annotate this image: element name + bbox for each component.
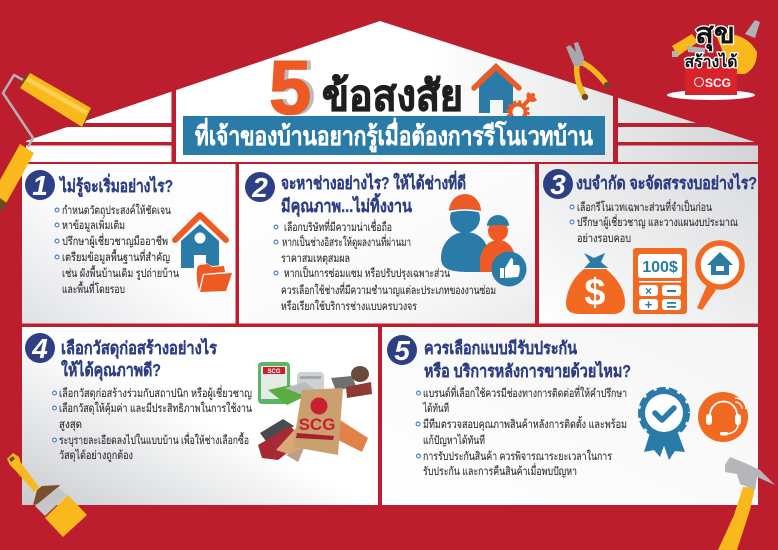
checklist 2: หรือเรียกใช้บริการช่างแบบครบวงจร bbox=[281, 300, 417, 313]
checklist 2: หากเป็นช่างอิสระให้ดูผลงานที่ผ่านมา bbox=[282, 234, 411, 249]
checklist 5: การรับประกันสินค้า ควรพิจารณาระยะเวลาในการ bbox=[423, 450, 612, 463]
icon: calculator: 100$ bbox=[642, 259, 678, 276]
checklist 1: และพื้นที่โดยรอบ bbox=[62, 281, 125, 296]
panel 3: limited budget bbox=[539, 164, 758, 324]
icon: paint roller bbox=[0, 72, 92, 212]
checklist 2: เลือกบริษัทที่มีความน่าเชื่อถือ bbox=[284, 219, 392, 234]
image: SCG building materials bbox=[258, 362, 372, 462]
icon: calculator: × bbox=[645, 284, 652, 298]
checklist 4: สูงสุด bbox=[59, 419, 82, 431]
heading 5: ควรเลือกแบบมีรับประกัน bbox=[424, 338, 577, 358]
house roof with siding bbox=[0, 21, 778, 165]
heading 2: จะหาช่างอย่างไร? ให้ได้ช่างที่ดี bbox=[281, 170, 466, 193]
image: SCG building materials: SCG bbox=[299, 415, 335, 434]
number badge 3 bbox=[543, 169, 573, 200]
number badge 5: 5 bbox=[394, 335, 410, 366]
icon: headset support bbox=[698, 392, 748, 442]
icon: house and folder bbox=[175, 215, 232, 292]
icon: money bag bbox=[566, 253, 625, 314]
checklist 1: หาข้อมูลเพิ่มเติม bbox=[62, 217, 125, 232]
logo: SCG campaign badge bbox=[667, 18, 760, 100]
icon: paint brush bbox=[7, 453, 87, 537]
icon: quality badge bbox=[640, 388, 688, 460]
checklist 3 bbox=[570, 199, 738, 245]
logo: SCG campaign badge: SCG bbox=[705, 76, 731, 90]
title: big number 5: 5 bbox=[273, 46, 315, 131]
checklist 1: เตรียมข้อมูลพื้นฐานที่สำคัญ bbox=[62, 249, 170, 264]
heading 4 bbox=[61, 337, 217, 381]
title: heading: ข้อสงสัย bbox=[322, 72, 463, 119]
checklist 3: อย่างรอบคอบ bbox=[577, 233, 631, 245]
heading 1: ไม่รู้จะเริ่มอย่างไร? bbox=[58, 173, 173, 198]
heading 2: มีคุณภาพ...ไม่ทิ้งงาน bbox=[281, 193, 412, 217]
checklist 4: วัสดุได้อย่างถูกต้อง bbox=[59, 449, 133, 462]
checklist 4: เลือกวัสดุก่อสร้างร่วมกับสถาปนิก หรือผู้เชี่ยวชาญ bbox=[59, 385, 252, 400]
icon: calculator bbox=[633, 248, 687, 314]
panel 2: finding a contractor bbox=[239, 164, 535, 324]
number badge 1: 1 bbox=[32, 170, 48, 201]
checklist 5: ได้ทันที bbox=[422, 402, 449, 415]
checklist 2: หากเป็นการซ่อมแซม หรือปรับปรุงเฉพาะส่วน bbox=[284, 265, 450, 280]
checklist 2: ควรเลือกใช้ช่างที่มีความชำนาญแต่ละประเภทของงานซ่อม bbox=[281, 282, 496, 297]
logo: SCG campaign badge: สุข bbox=[695, 18, 735, 51]
checklist 4: เลือกวัสดุให้คุ้มค่า และมีประสิทธิภาพในการใช้งาน bbox=[59, 402, 252, 415]
icon: hammer bbox=[718, 457, 775, 550]
checklist 4: ระบุรายละเอียดลงไปในแบบบ้าน เพื่อให้ช่างเลือกซื้อ bbox=[59, 432, 249, 447]
icon: calculator: + bbox=[645, 297, 653, 312]
checklist 5: แบรนด์ที่เลือกใช้ควรมีช่องทางการติดต่อที่ให้คำปรึกษา bbox=[423, 385, 627, 400]
checklist 4 bbox=[53, 385, 252, 462]
checklist 1: ปรึกษาผู้เชี่ยวชาญมืออาชีพ bbox=[62, 233, 168, 248]
image: SCG building materials: SCG bbox=[267, 369, 281, 375]
icon: magnifier with house bbox=[697, 243, 742, 310]
panel 5: warranty and after-sales bbox=[382, 327, 758, 505]
heading 4: ให้ได้คุณภาพดี? bbox=[61, 359, 161, 381]
title banner: ที่เจ้าของบ้านอยากรู้เมื่อต้องการรีโนเวทบ้าน bbox=[195, 117, 593, 153]
checklist 1 bbox=[55, 203, 179, 296]
checklist 3: เลือกรีโนเวทเฉพาะส่วนที่จำเป็นก่อน bbox=[577, 199, 712, 214]
logo: SCG campaign badge: สร้างได้ bbox=[684, 52, 738, 71]
panel 1: where to start bbox=[22, 164, 236, 324]
icon: contractors with thumbs up bbox=[441, 194, 526, 286]
number badge 2: 2 bbox=[251, 172, 268, 203]
icon: house with gear and wrench bbox=[474, 63, 537, 122]
panel 4: materials bbox=[22, 327, 378, 505]
checklist 2 bbox=[274, 219, 496, 313]
heading 4: เลือกวัสดุก่อสร้างอย่างไร bbox=[61, 337, 217, 359]
checklist 1: กำหนดวัตถุประสงค์ให้ชัดเจน bbox=[62, 203, 171, 217]
number badge 3: 3 bbox=[550, 169, 566, 200]
number badge 2 bbox=[245, 172, 275, 203]
heading 2 bbox=[281, 170, 466, 217]
number badge 1 bbox=[25, 170, 55, 201]
checklist 2: ราคาสมเหตุสมผล bbox=[281, 253, 350, 265]
checklist 5: มีทีมตรวจสอบคุณภาพสินค้าหลังการติดตั้ง และพร้อม bbox=[423, 416, 627, 431]
checklist 5: แก้ปัญหาได้ทันที bbox=[423, 434, 485, 447]
number badge 4 bbox=[25, 333, 55, 364]
checklist 5 bbox=[416, 385, 627, 478]
number badge 4: 4 bbox=[31, 333, 48, 364]
title: big number 5: 5 bbox=[269, 46, 311, 131]
number badge 5 bbox=[387, 335, 417, 366]
checklist 1: เช่น ผังพื้นบ้านเดิม รูปถ่ายบ้าน bbox=[62, 265, 179, 280]
title banner bbox=[183, 116, 605, 155]
icon: money bag: $ bbox=[584, 272, 606, 314]
checklist 5: รับประกัน และการคืนสินค้าเมื่อพบปัญหา bbox=[423, 463, 577, 478]
icon: pliers bbox=[566, 42, 610, 100]
heading 5 bbox=[424, 338, 631, 381]
heading 5: หรือ บริการหลังการขายด้วยไหม? bbox=[424, 360, 631, 381]
